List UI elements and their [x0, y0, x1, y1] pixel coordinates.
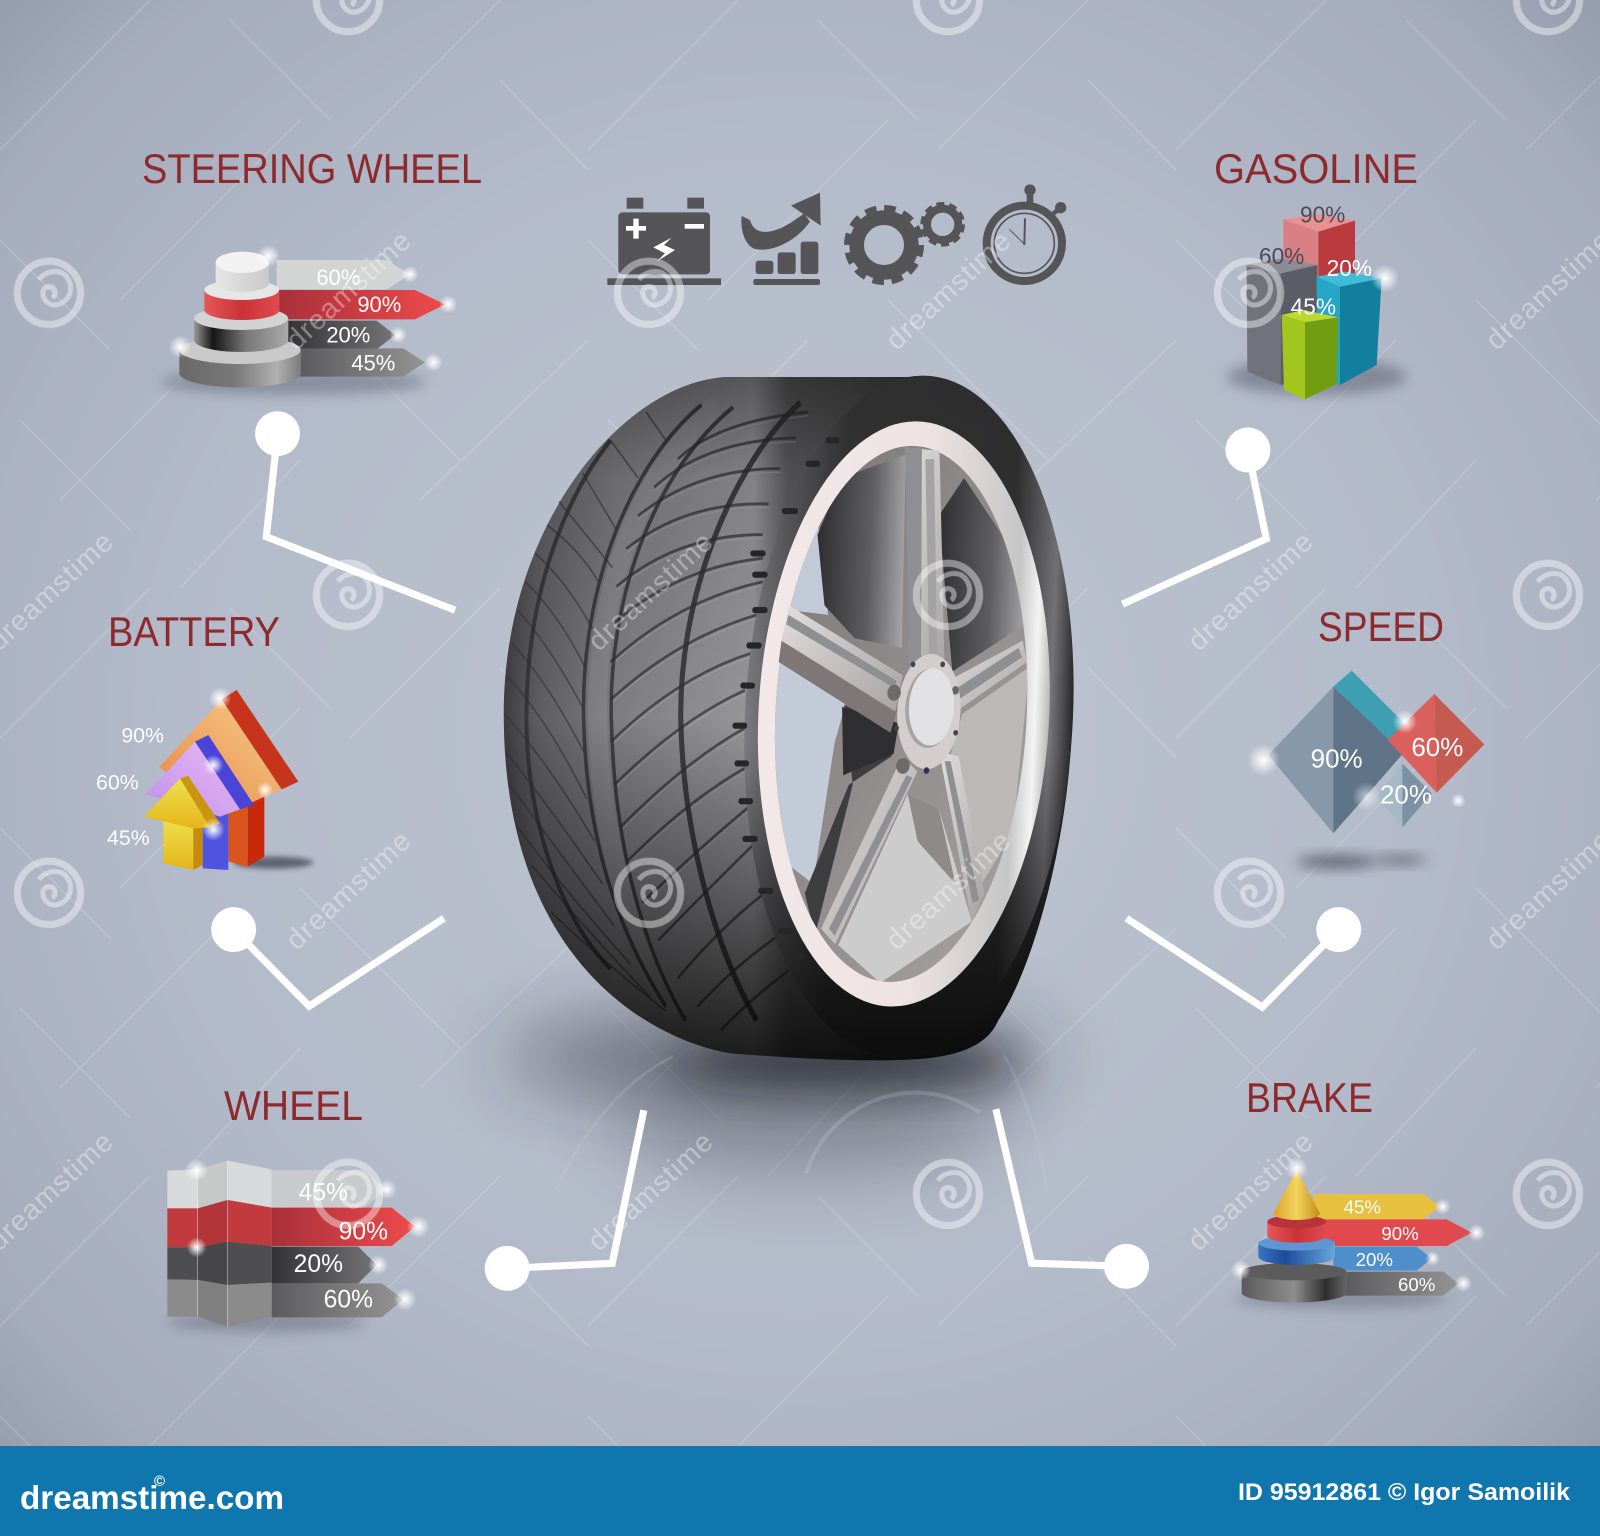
- heading: brake: BRAKE: [1246, 1074, 1373, 1121]
- value labels: 45%: [1344, 1196, 1381, 1217]
- value labels: [1344, 1196, 1435, 1295]
- chart: 3d arrows: [96, 687, 313, 870]
- icon: stopwatch: [987, 184, 1066, 281]
- value labels: 45%: [1291, 294, 1336, 320]
- footer logo mark: ©: [154, 1473, 165, 1490]
- spokes: [776, 641, 900, 733]
- heading: gasoline: GASOLINE: [1214, 145, 1418, 192]
- value labels: 45%: [107, 826, 150, 850]
- wheel ground shadow and reflection: [500, 1017, 1051, 1189]
- chart: cone stack with arrows: [1231, 1157, 1485, 1308]
- hub: [895, 654, 963, 769]
- panel: speed: [1247, 603, 1484, 868]
- tire sidewall: [731, 376, 1087, 1057]
- central wheel illustration: [504, 376, 1087, 1060]
- chart: diamonds: [1247, 671, 1484, 868]
- value labels: 60%: [1259, 243, 1304, 269]
- panel: steering wheel: [142, 145, 482, 395]
- value labels: 60%: [316, 265, 360, 290]
- footer logo text: dreamstime.com: [20, 1479, 284, 1516]
- value labels: 60%: [324, 1287, 373, 1314]
- heading: battery: BATTERY: [108, 608, 280, 655]
- stock watermarks: dreamstime: [880, 824, 1018, 956]
- value labels: 60%: [1398, 1274, 1435, 1295]
- value labels: 90%: [339, 1218, 388, 1245]
- value labels: [1259, 202, 1372, 320]
- connector: gasoline: [1122, 428, 1270, 604]
- value labels: 60%: [96, 770, 139, 794]
- chart: 3d bars: [1227, 202, 1407, 399]
- value labels: 45%: [299, 1180, 348, 1207]
- stock watermarks: dreamstime: [280, 224, 418, 356]
- value labels: [316, 265, 401, 375]
- value labels: 90%: [1300, 202, 1345, 228]
- value labels: 20%: [1356, 1249, 1393, 1270]
- value labels: 90%: [357, 292, 401, 317]
- footer band: [0, 1446, 1600, 1536]
- stock watermarks: dreamstime: [1182, 525, 1320, 657]
- value labels: 20%: [326, 323, 370, 348]
- top icon row: [607, 184, 1066, 285]
- icon: battery: [607, 198, 721, 285]
- stock watermarks: dreamstime: [1182, 1125, 1320, 1257]
- panel: battery: [96, 608, 313, 870]
- chart: folded ribbons: [167, 1159, 430, 1332]
- alloy rim: [746, 421, 1061, 1007]
- heading: steering wheel: STEERING WHEEL: [142, 145, 482, 192]
- stock watermarks: dreamstime: [880, 224, 1018, 356]
- tire tread: [504, 377, 1072, 1060]
- value labels: 20%: [294, 1251, 343, 1278]
- panel: brake: [1231, 1074, 1485, 1308]
- icon: growth chart: [741, 193, 821, 285]
- stock watermarks: dreamstime: [582, 525, 720, 657]
- value labels: 90%: [1311, 743, 1363, 773]
- tread shoulder notches: [735, 440, 837, 957]
- value labels: 90%: [1381, 1223, 1419, 1244]
- heading: wheel: WHEEL: [224, 1082, 363, 1129]
- value labels: 60%: [1411, 732, 1463, 762]
- panel: wheel: [167, 1082, 430, 1332]
- stock watermarks: dreamstime: [582, 1125, 720, 1257]
- heading: speed: SPEED: [1318, 603, 1444, 650]
- panel: gasoline: [1214, 145, 1418, 399]
- value labels: [294, 1180, 388, 1314]
- value labels: 45%: [351, 350, 395, 375]
- value labels: 90%: [121, 724, 164, 748]
- connector: speed: [1127, 907, 1361, 1007]
- connector: wheel: [485, 1110, 644, 1291]
- stock watermarks: dreamstime: [280, 824, 418, 956]
- connector: battery: [211, 907, 444, 1006]
- chart: stacked cylinders with arrows: [160, 245, 458, 395]
- value labels: 20%: [1380, 779, 1432, 809]
- value labels: [96, 724, 164, 850]
- connector: steering wheel: [255, 411, 455, 610]
- value labels: [1311, 732, 1463, 809]
- rim interior: [774, 446, 1028, 982]
- connector: brake: [996, 1109, 1149, 1289]
- connector lines: [211, 411, 1361, 1291]
- icon: gears: [848, 204, 963, 281]
- footer credit: ID 95912861 © Igor Samoilik: [1238, 1479, 1571, 1506]
- value labels: 20%: [1327, 255, 1372, 281]
